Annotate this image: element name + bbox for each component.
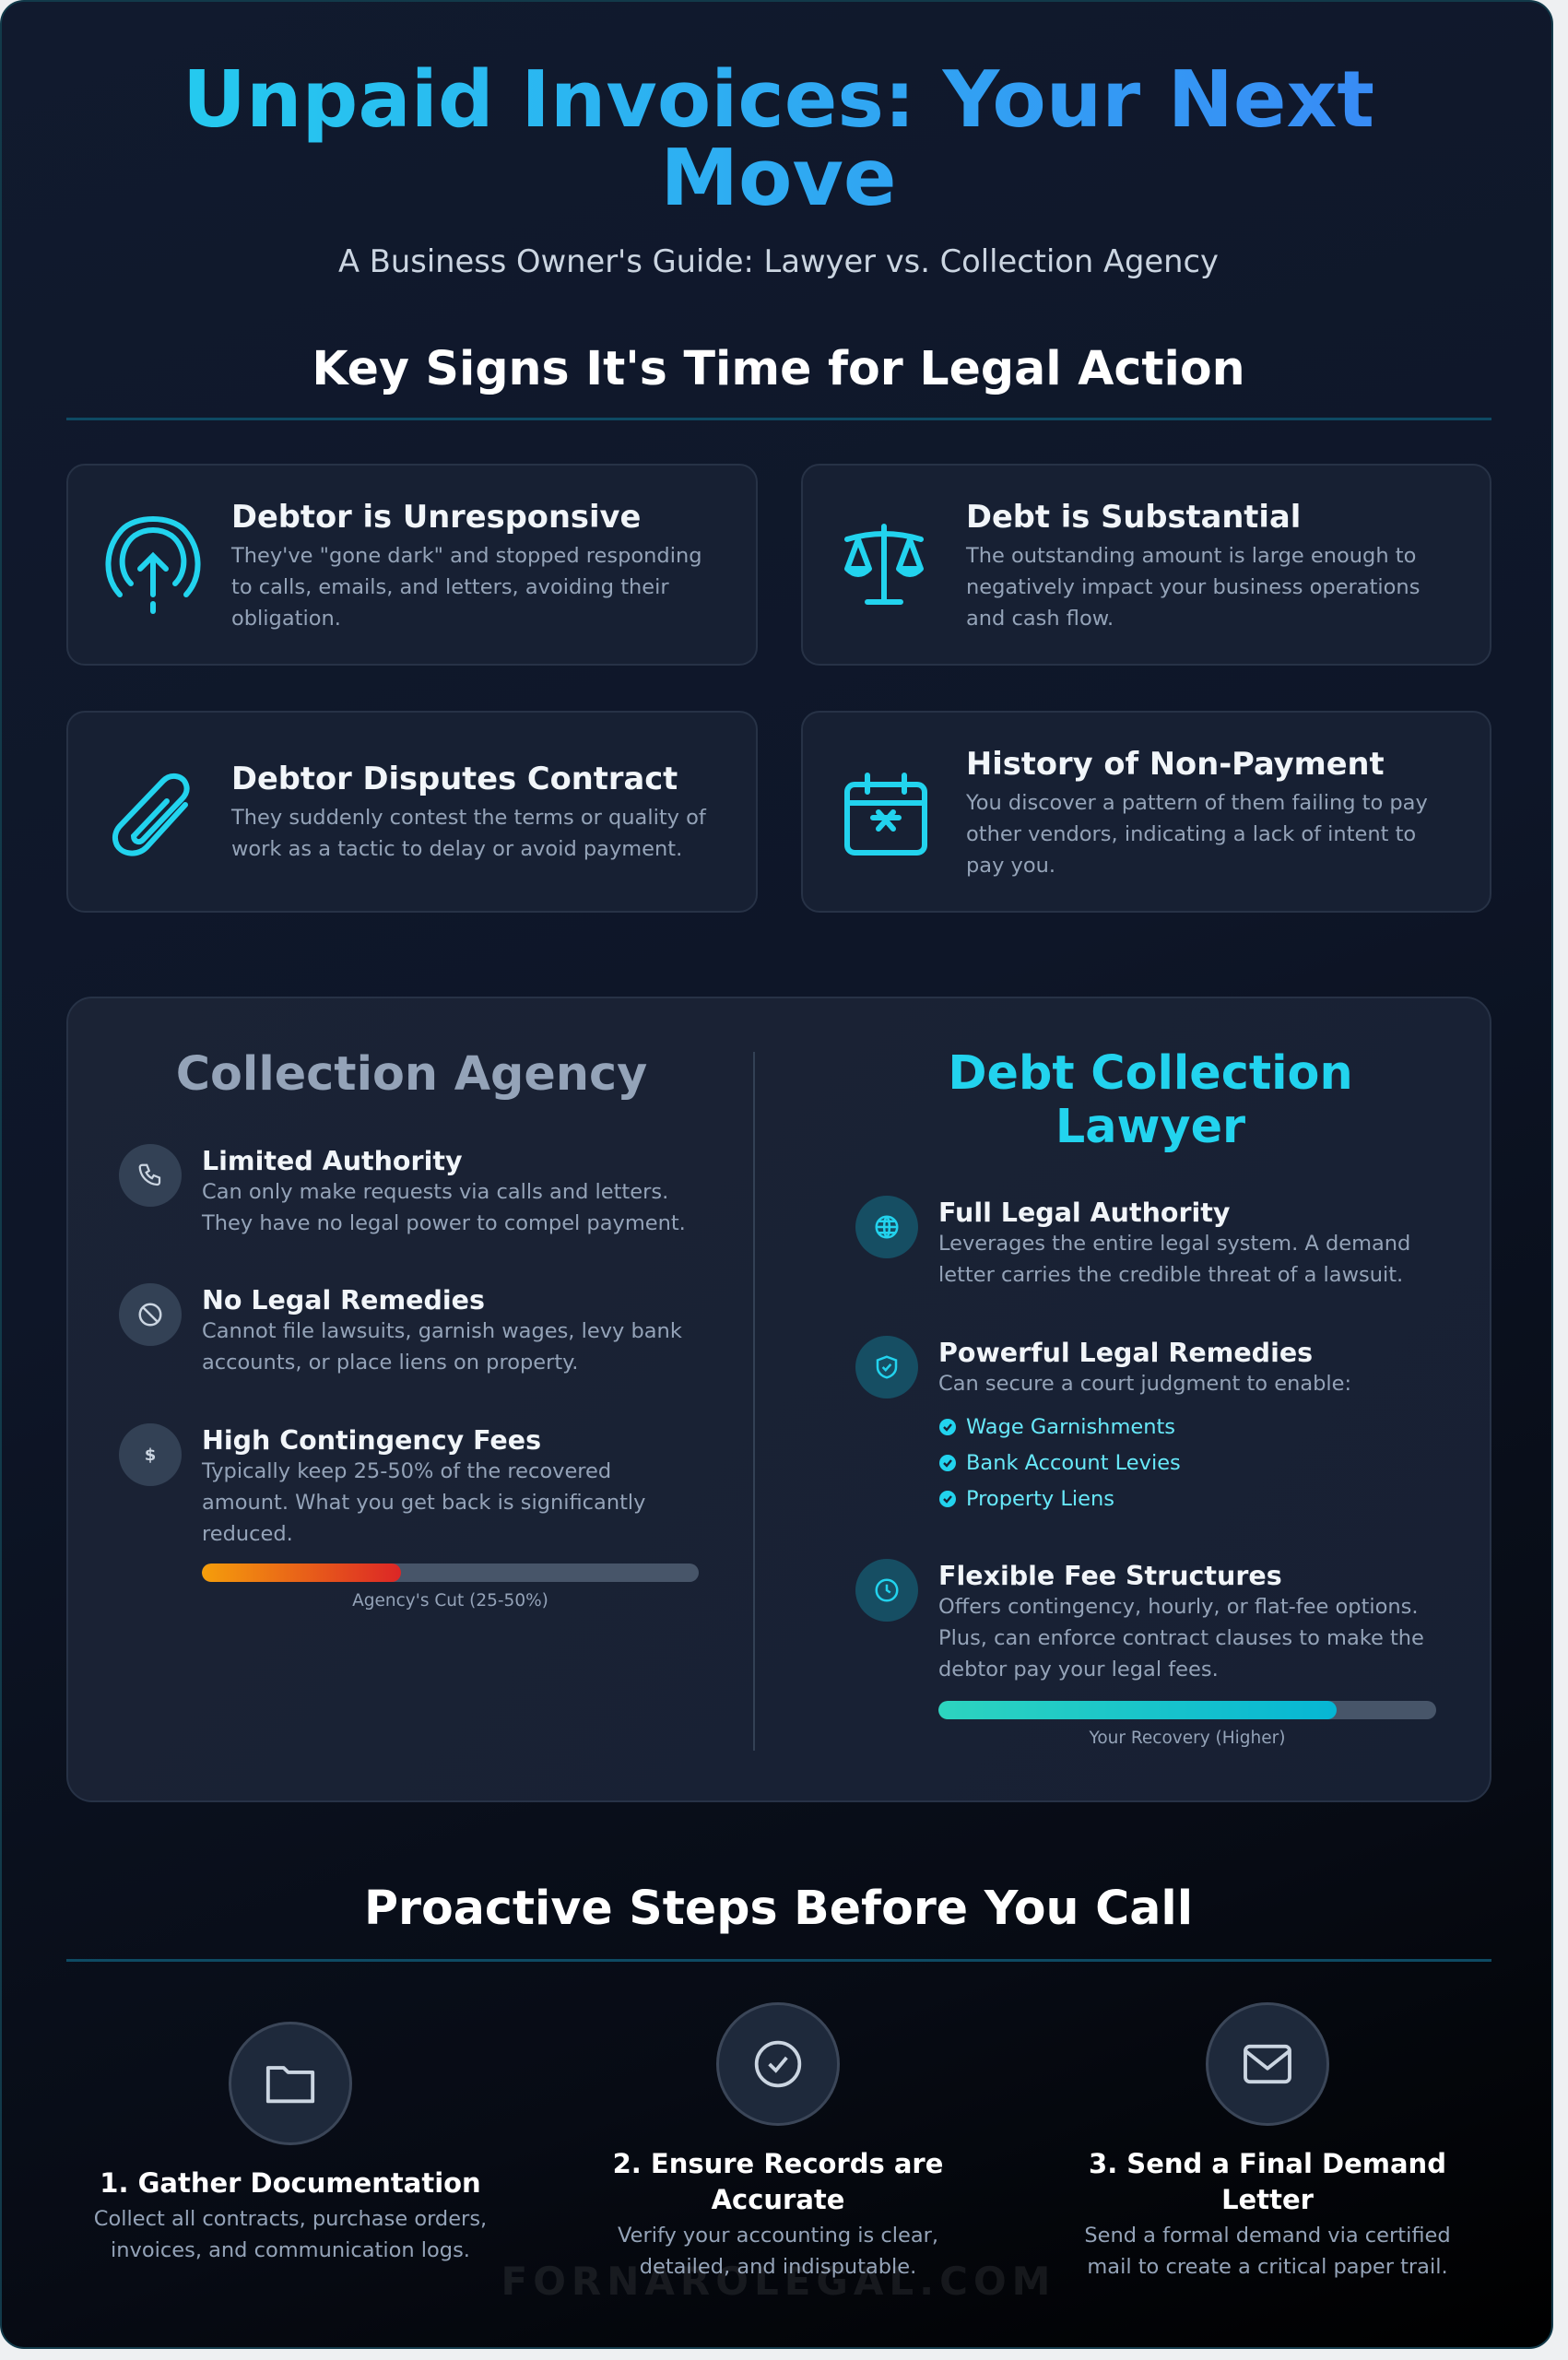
subtitle: A Business Owner's Guide: Lawyer vs. Collection Agency — [338, 243, 1219, 279]
heading: lawyer — [948, 1045, 1353, 1153]
icon: dollar — [119, 1423, 182, 1486]
step 3 — [1084, 2002, 1451, 2279]
icon: check — [716, 2002, 840, 2126]
bullet list: Wage Garnishments — [966, 1414, 1175, 1438]
heading: lawyer: Lawyer — [1055, 1099, 1245, 1153]
heading: lawyer: Debt Collection — [948, 1045, 1353, 1100]
panel: comparison: Leverages the entire legal system. A demand letter carries the credible threat of a lawsuit. — [938, 1232, 1410, 1287]
text — [966, 499, 1420, 631]
text — [230, 499, 702, 631]
text: Debtor is Unresponsive — [231, 499, 641, 535]
step 1: 1. Gather Documentation — [100, 2167, 481, 2199]
panel: comparison: Flexible Fee Structures — [938, 1561, 1282, 1591]
text: They've "gone dark" and stopped responding to calls, emails, and letters, avoiding their obligation. — [231, 544, 702, 631]
step 2: 2. Ensure Records are Accurate — [613, 2148, 943, 2215]
card: history non-payment — [801, 711, 1491, 913]
card: debt substantial — [801, 464, 1491, 666]
item: powerful remedies — [855, 1336, 1351, 1510]
text: History of Non-Payment — [966, 746, 1385, 782]
text: You discover a pattern of them failing to pay other vendors, indicating a lack of intent to pay you. — [966, 791, 1428, 878]
bullet list: Bank Account Levies — [966, 1451, 1181, 1475]
step 3: 3. Send a Final Demand Letter — [1089, 2148, 1446, 2215]
panel: comparison: Typically keep 25-50% of the recovered amount. What you get back is significantly reduced. — [202, 1459, 645, 1546]
panel: comparison — [66, 997, 1491, 1802]
text: The outstanding amount is large enough to negatively impact your business operations and cash flow. — [966, 544, 1420, 631]
step 2: Verify your accounting is clear, detailed, and indisputable. — [618, 2224, 938, 2279]
icon: gone dark — [105, 516, 201, 614]
panel: comparison: Cannot file lawsuits, garnish wages, levy bank accounts, or place liens on property. — [202, 1319, 682, 1375]
bar: your recovery — [938, 1701, 1436, 1748]
panel: comparison: Offers contingency, hourly, or flat-fee options. Plus, can enforce contract clauses to make the debtor pay your legal fees. — [938, 1595, 1424, 1682]
text: They suddenly contest the terms or quality of work as a tactic to delay or avoid payment. — [231, 806, 706, 861]
title — [2, 61, 1555, 218]
bullet list: Property Liens — [966, 1486, 1114, 1510]
panel: comparison: Can only make requests via calls and letters. They have no legal power to compel payment. — [202, 1180, 686, 1235]
icon: folder — [229, 2022, 352, 2145]
item: limited authority — [119, 1144, 686, 1235]
step 1 — [94, 2022, 487, 2262]
icon: paperclip — [112, 773, 190, 856]
text: Debt is Substantial — [966, 499, 1301, 535]
item: high contingency fees — [119, 1423, 645, 1546]
icon: globe — [855, 1196, 918, 1258]
bar: agency cut — [202, 1564, 699, 1611]
text — [230, 761, 706, 861]
title: Unpaid Invoices: Your Next — [183, 54, 1374, 146]
heading: proactive steps: Proactive Steps Before You Call — [364, 1881, 1193, 1935]
icon: clock — [855, 1559, 918, 1622]
step 1: Collect all contracts, purchase orders, invoices, and communication logs. — [94, 2207, 487, 2262]
step 3: Send a formal demand via certified mail to create a critical paper trail. — [1084, 2224, 1451, 2279]
watermark: FORNAROLEGAL.COM — [501, 2259, 1055, 2304]
bullet list — [939, 1414, 1181, 1510]
panel: comparison: Can secure a court judgment to enable: — [938, 1372, 1351, 1396]
icon: calendar x — [844, 773, 927, 856]
icon: shield — [855, 1336, 918, 1398]
card: disputes contract — [66, 711, 758, 913]
text — [966, 746, 1428, 878]
step 2 — [613, 2002, 943, 2279]
card: debtor unresponsive — [66, 464, 758, 666]
panel: comparison: No Legal Remedies — [202, 1285, 485, 1316]
bar: agency cut: Agency's Cut (25-50%) — [352, 1591, 548, 1611]
panel: comparison: High Contingency Fees — [202, 1425, 541, 1456]
title: Move — [660, 133, 897, 224]
panel: comparison: Powerful Legal Remedies — [938, 1338, 1313, 1368]
icon: dollar: $ — [145, 1446, 156, 1464]
icon: prohibited — [119, 1283, 182, 1346]
bar: your recovery: Your Recovery (Higher) — [1090, 1729, 1285, 1748]
item: full legal authority — [855, 1196, 1410, 1287]
item: flexible fees — [855, 1559, 1424, 1682]
icon: envelope — [1206, 2002, 1329, 2126]
panel: comparison: Full Legal Authority — [938, 1198, 1230, 1228]
heading: key signs: Key Signs It's Time for Legal Action — [312, 341, 1245, 395]
icon: phone — [119, 1144, 182, 1207]
heading: collection agency: Collection Agency — [176, 1046, 647, 1101]
item: no legal remedies — [119, 1283, 682, 1375]
icon: scales — [844, 524, 924, 605]
panel: comparison: Limited Authority — [202, 1146, 463, 1176]
text: Debtor Disputes Contract — [231, 761, 678, 796]
